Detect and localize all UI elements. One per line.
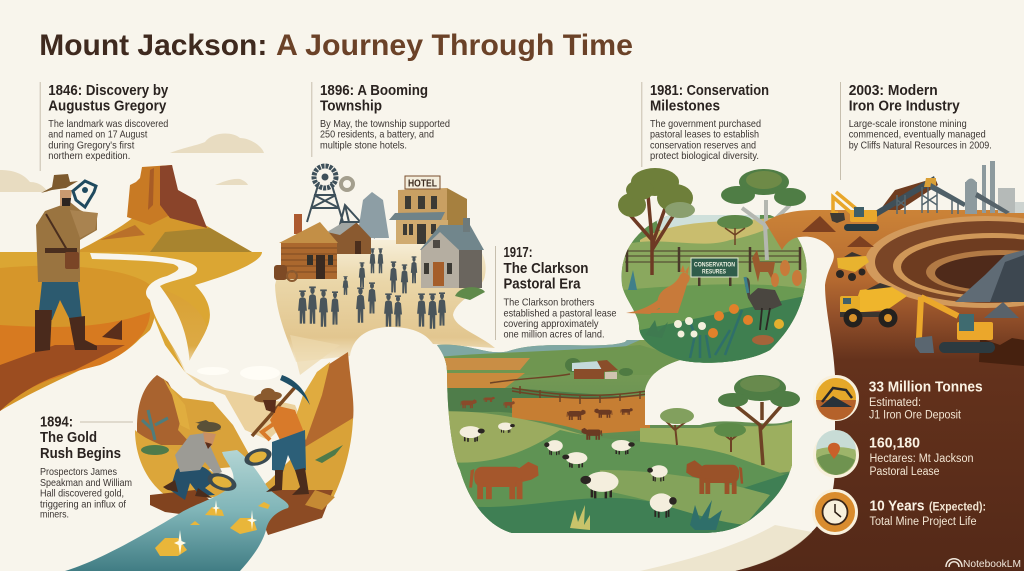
text block: 1894 gold rush — [40, 415, 133, 521]
icon: large haul truck — [840, 283, 907, 328]
text block: 1917 pastoral era: The Clarkson — [504, 261, 588, 277]
text block: 1894 gold rush: Speakman and William — [40, 477, 132, 489]
sign: conservation reserves: CONSERVATION — [694, 262, 735, 268]
text block: 2003 iron ore — [840, 82, 992, 180]
wildflowers — [628, 270, 784, 358]
text block: 1894 gold rush: miners. — [40, 509, 69, 521]
stat: 10 years: (Expected): — [929, 502, 986, 514]
text block: 1917 pastoral era — [495, 245, 617, 341]
text block: 1981 conservation: conservation reserves and — [650, 139, 756, 151]
text block: 1981 conservation: The government purchased — [650, 118, 761, 130]
river — [65, 450, 289, 571]
text block: 1917 pastoral era: established a pastoral lease — [504, 307, 617, 319]
sign: conservation reserves — [691, 258, 738, 286]
text block: 1981 conservation: 1981: Conservation — [650, 83, 769, 99]
icon: map pin over fields — [814, 430, 858, 476]
scene: 1917 pastoral land — [430, 340, 800, 540]
scene: 1894 gold canyon with river and miners — [65, 352, 353, 571]
text block: 1896 township — [311, 82, 450, 157]
title: A Journey Through Time — [276, 29, 633, 62]
open-cut pit — [865, 216, 1024, 308]
stat: 160,180 hectares: 160,180 — [869, 435, 920, 452]
text block: 1896 township: By May, the township supported — [320, 118, 450, 130]
icon: kneeling miner with pan — [163, 420, 239, 500]
text block: 1846 discovery: Augustus Gregory — [48, 99, 166, 115]
text block: 1981 conservation: pastoral leases to establish — [650, 129, 759, 141]
text block: 1917 pastoral era: one million acres of land. — [504, 329, 604, 341]
text block: 2003 iron ore: 2003: Modern — [849, 83, 938, 99]
text block: 1846 discovery: 1846: Discovery by — [48, 83, 168, 99]
text block: 1846 discovery: during Gregory's first — [48, 139, 134, 151]
icon: standing miner with pickaxe and pan — [242, 375, 310, 495]
icon: fade edge at base — [640, 525, 812, 571]
icon: surveyor with sextant — [35, 174, 98, 352]
text block: 1894 gold rush: Prospectors James — [40, 466, 117, 478]
clouds in canyon — [197, 366, 280, 380]
text block: 2003 iron ore: commenced, eventually managed — [849, 129, 986, 141]
stat: 33 million tonnes: 33 Million Tonnes — [869, 379, 983, 396]
text block: 1894 gold rush: The Gold — [40, 430, 97, 446]
stat: 160,180 hectares — [814, 430, 974, 478]
text block: 1896 township: Township — [320, 99, 382, 115]
text block: 1917 pastoral era: Pastoral Era — [504, 277, 581, 293]
text block: 1981 conservation: Milestones — [650, 99, 720, 115]
icon: clock — [814, 490, 856, 534]
text block: 2003 iron ore: by Cliffs Natural Resources in 2009. — [849, 139, 992, 151]
text block: 1917 pastoral era: covering approximately — [504, 318, 599, 330]
text block: 1917 pastoral era: 1917: — [504, 245, 532, 261]
icon: large excavator — [915, 297, 995, 353]
stat: 160,180 hectares: Pastoral Lease — [870, 466, 940, 478]
stat: 10 years: Total Mine Project Life — [870, 516, 976, 528]
stat: 160,180 hectares: Hectares: Mt Jackson — [870, 453, 974, 465]
stat: 33 million tonnes: J1 Iron Ore Deposit — [869, 410, 962, 422]
scene: 1896 township — [274, 166, 495, 375]
scene: 1981 conservation reserve — [615, 168, 815, 370]
crowd of townsfolk — [298, 248, 446, 329]
text block: 1917 pastoral era: The Clarkson brothers — [504, 297, 594, 309]
clouds — [0, 133, 264, 192]
icon: small haul truck — [836, 252, 869, 281]
text block: 1846 discovery: northern expedition. — [48, 150, 130, 162]
logo: NotebookLM: NotebookLM — [963, 558, 1021, 570]
icon: kangaroo — [626, 265, 690, 314]
grass and shrubs — [690, 500, 722, 530]
acacia trees — [660, 375, 800, 465]
text block: 1894 gold rush: Hall discovered gold, — [40, 488, 124, 500]
text block: 2003 iron ore: Large-scale ironstone mining — [849, 118, 967, 130]
text block: 1894 gold rush: 1894: — [40, 415, 73, 431]
text block: 1896 township: multiple stone hotels. — [320, 139, 407, 151]
title: Mount Jackson: — [39, 29, 267, 62]
farmhouse — [565, 358, 633, 379]
farm animals: cattle — [461, 397, 743, 499]
icon: ore pile — [814, 376, 858, 420]
stat: 33 million tonnes: Estimated: — [869, 397, 921, 409]
text block: 1981 conservation: protect biological diversity. — [650, 150, 759, 162]
stat: 10 years — [814, 490, 986, 534]
scene: 1896 township: HOTEL — [408, 178, 437, 190]
text block: 1846 discovery: The landmark was discovered — [48, 118, 168, 130]
text block: 1981 conservation — [641, 82, 769, 167]
text block: 1896 township: 1896: A Booming — [320, 83, 428, 99]
sign: conservation reserves: RESURES — [702, 270, 726, 276]
icon: excavator at plant — [830, 192, 879, 231]
text block: 1846 discovery: and named on 17 August — [48, 129, 147, 141]
farm animals: sheep — [460, 422, 677, 518]
scene: 2003 iron ore mine — [640, 161, 1024, 571]
icon: emu — [745, 277, 782, 330]
text block: 1894 gold rush: triggering an influx of — [40, 498, 126, 510]
gold nuggets — [155, 502, 270, 556]
mesa — [75, 165, 252, 252]
fence — [625, 247, 800, 272]
scene: 1846 discovery with mesa and surveyor — [0, 133, 264, 411]
title — [39, 29, 633, 62]
icon: deer and small animals — [752, 250, 802, 287]
text block: 1894 gold rush: Rush Begins — [40, 446, 121, 462]
text block: 1846 discovery — [40, 82, 168, 171]
text block: 2003 iron ore: Iron Ore Industry — [849, 99, 960, 115]
text block: 1896 township: 250 residents, a battery, and — [320, 129, 434, 141]
eucalyptus trees — [618, 168, 806, 275]
fences — [490, 374, 647, 404]
stat: 10 years: 10 Years — [870, 498, 924, 515]
processing plant and conveyors — [870, 161, 1024, 219]
stat: 33 million tonnes — [814, 376, 983, 422]
